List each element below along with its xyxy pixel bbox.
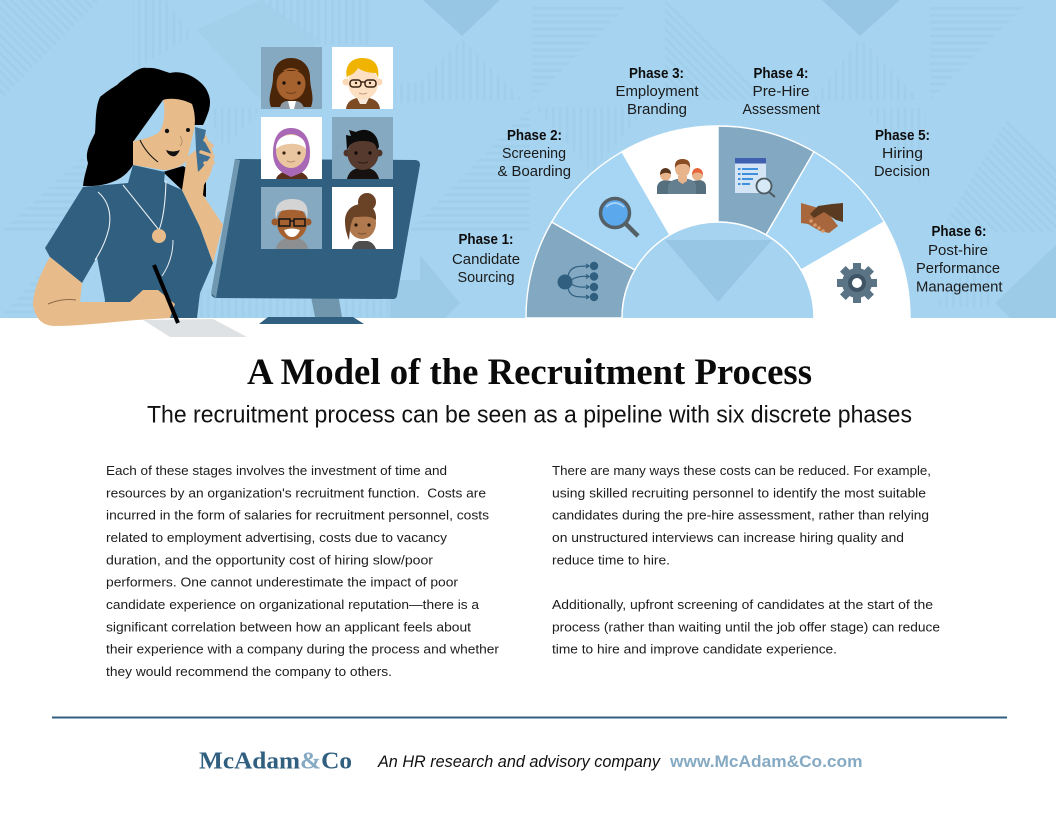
left text column: Each of these stages involves the investment of time and (106, 463, 447, 478)
label: phase 6: Post-hire (928, 243, 988, 259)
right text column: time to hire and improve candidate experience. (552, 642, 837, 657)
label: phase 6: Management (916, 280, 1002, 296)
wedge: phase 4 (718, 126, 814, 235)
process semicircle (526, 126, 910, 318)
right text column: candidates during the pre-hire assessment, rather than relying (552, 508, 929, 523)
left text column (106, 463, 500, 679)
right text column: using skilled recruiting personnel to identify the most suitable (552, 485, 926, 500)
wedge: phase 6 (801, 222, 910, 318)
icon: handshake (801, 203, 843, 233)
header background (0, 0, 1056, 318)
avatar: woman with hair bun (332, 187, 393, 249)
avatar: dark-skinned man (332, 117, 393, 179)
icon: people group (657, 159, 706, 194)
label: phase 5: Hiring (882, 146, 923, 162)
label: phase 6 (916, 224, 1002, 296)
label: phase 2: Phase 2: (507, 128, 562, 144)
label: phase 5: Phase 5: (875, 128, 930, 144)
right text column (552, 463, 940, 657)
left text column: their experience with a company during the process and whether (106, 642, 500, 657)
label: phase 3: Phase 3: (629, 66, 684, 82)
left text column: related to employment advertising, costs due to vacancy (106, 530, 447, 545)
avatar: blond man with glasses (332, 47, 393, 109)
label: phase 3: Branding (627, 102, 687, 118)
label: phase 3: Employment (616, 84, 698, 100)
title: A Model of the Recruitment Process (247, 352, 812, 393)
page background below header (0, 318, 1056, 816)
left text column: candidate experience on organizational reputation—there is a (106, 597, 480, 612)
label: phase 1 (452, 232, 520, 286)
label: phase 6: Phase 6: (932, 224, 986, 240)
label: phase 4: Phase 4: (754, 66, 808, 82)
label: phase 2: Screening (502, 146, 566, 162)
icon: sourcing flow (558, 262, 598, 301)
label: phase 1: Phase 1: (458, 232, 514, 248)
icon: gear (837, 263, 877, 303)
footer tagline: An HR research and advisory company (377, 753, 662, 771)
left text column: significant correlation between how an applicant feels about (106, 619, 471, 634)
label: phase 3 (616, 66, 698, 118)
right text column: process (rather than waiting until the job offer stage) can reduce (552, 619, 940, 634)
right text column: reduce time to hire. (552, 552, 670, 567)
label: phase 5 (874, 128, 930, 180)
inner semicircle (622, 222, 814, 318)
label: phase 5: Decision (874, 164, 930, 180)
illustration: video call avatars (261, 47, 393, 249)
label: phase 4: Pre-Hire (752, 84, 810, 100)
label: phase 1: Candidate (452, 252, 520, 268)
left text column: duration, and the opportunity cost of hiring slow/poor (106, 552, 434, 567)
icon: assessment document (735, 158, 775, 197)
illustration: paper (143, 319, 247, 337)
right text column: There are many ways these costs can be reduced. For example, (552, 463, 931, 478)
subtitle: The recruitment process can be seen as a pipeline with six discrete phases (147, 402, 912, 428)
avatar: woman in purple hijab (261, 117, 322, 179)
label: phase 2 (498, 128, 571, 180)
avatar: older man with glasses (261, 187, 322, 249)
footer website: www.McAdam&Co.com (669, 753, 862, 771)
right text column: on unstructured interviews can increase hiring quality and (552, 530, 904, 545)
avatar: woman with long brown hair (261, 47, 322, 109)
wedge: phase 1 (526, 222, 635, 318)
left text column: incurred in the form of salaries for recruitment personnel, costs (106, 508, 489, 523)
left text column: resources by an organization's recruitment function. Costs are (106, 485, 486, 500)
label: phase 1: Sourcing (458, 270, 514, 286)
label: phase 4 (742, 66, 820, 118)
wedge: phase 5 (766, 152, 884, 270)
left text column: they would recommend the company to others. (106, 664, 392, 679)
wedge: phase 2 (552, 152, 670, 270)
left text column: performers. One cannot underestimate the impact of poor (106, 575, 459, 590)
illustration: woman on the phone (33, 68, 223, 326)
label: phase 2: & Boarding (498, 164, 571, 180)
illustration: monitor (211, 159, 420, 324)
label: phase 6: Performance (916, 261, 1000, 277)
label: phase 4: Assessment (742, 102, 820, 118)
icon: magnifying glass (600, 198, 638, 236)
footer logo: McAdam&Co (199, 748, 352, 774)
right text column: Additionally, upfront screening of candidates at the start of the (552, 597, 933, 612)
wedge: phase 3 (622, 126, 718, 235)
